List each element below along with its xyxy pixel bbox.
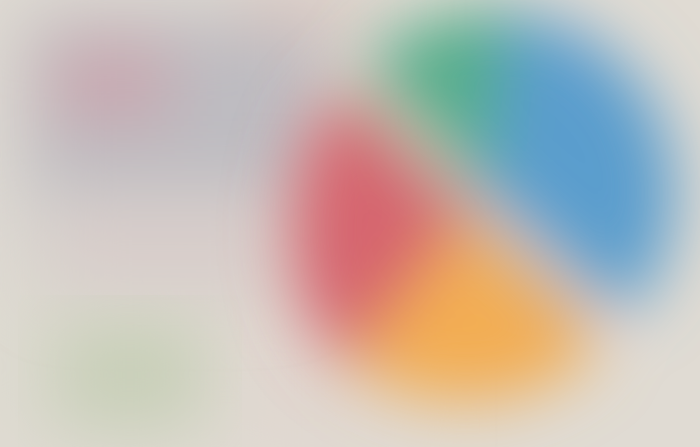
pie slice: blue: [488, 12, 675, 315]
pie slice: orange: [350, 216, 600, 402]
panel: upper left heading area: [35, 0, 380, 290]
pie chart: [291, 11, 675, 402]
background tint: [0, 0, 390, 447]
pie gap: [350, 85, 590, 320]
panel: lower left legend area: [60, 325, 200, 425]
pie slice: green: [366, 11, 512, 192]
pie slice: red: [291, 92, 466, 362]
